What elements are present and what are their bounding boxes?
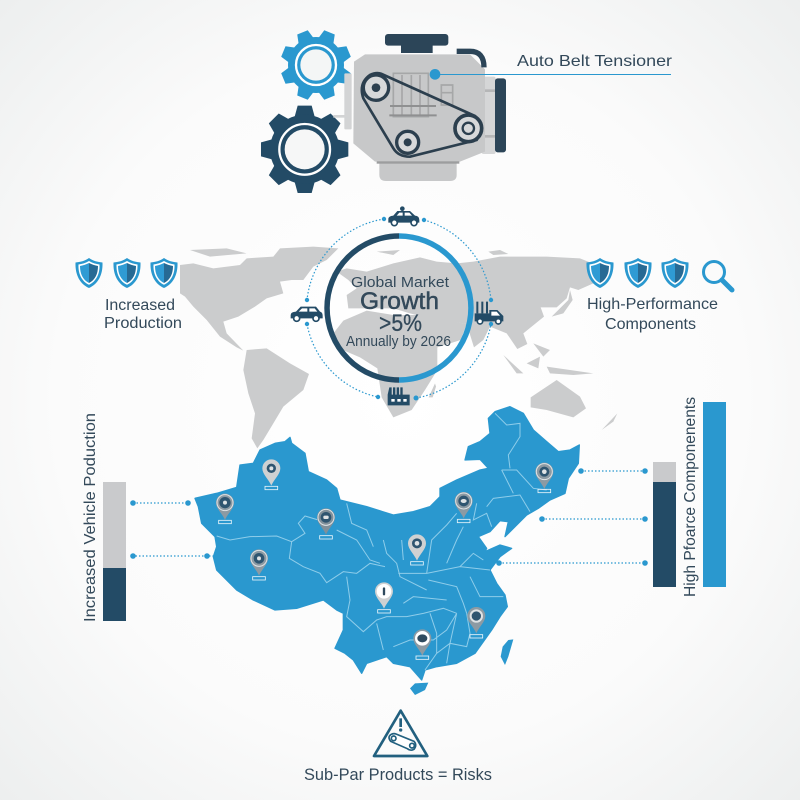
province borders — [217, 413, 547, 670]
pin 9 — [413, 629, 431, 659]
circle text: global market growth: Global Market — [351, 274, 450, 291]
bar: increased vehicle production — [103, 482, 126, 621]
text: increased production: Production — [104, 315, 182, 332]
icon: factory — [388, 387, 410, 405]
text: high-performance components: High-Performance — [587, 296, 718, 313]
icon: right truck — [475, 302, 503, 324]
china map — [195, 407, 579, 695]
label: increased vehicle production: Increased Vehicle Poduction — [82, 413, 99, 622]
panel: increased production — [75, 258, 182, 332]
circle text: global market growth — [346, 274, 451, 350]
label: high performance components: High Pfoarce Componenents — [682, 397, 699, 597]
map pins — [216, 459, 553, 659]
icon: belt and pulleys — [362, 73, 482, 157]
callout line — [430, 69, 671, 80]
dotted orbit — [305, 217, 493, 400]
china mainland — [195, 407, 579, 680]
text: high-performance components: Components — [605, 316, 696, 333]
text: increased production — [104, 297, 182, 332]
icon: engine block — [333, 34, 506, 181]
icon: navy gear — [261, 106, 348, 193]
panel: high-performance components — [586, 258, 732, 333]
pin 2 — [216, 494, 234, 524]
icon: top car — [388, 206, 419, 226]
pin 4 — [250, 549, 268, 580]
bar: high performance components — [653, 462, 676, 587]
left connectors — [130, 500, 215, 559]
pin 3 — [317, 508, 335, 539]
hainan and taiwan — [410, 639, 513, 695]
label: sub-par products: Sub-Par Products = Risks — [304, 765, 492, 784]
icon: magnifier — [704, 262, 732, 290]
text: increased production: Increased — [105, 297, 175, 314]
world map — [180, 247, 617, 448]
icon: warning belt — [374, 711, 427, 756]
pin 8 — [375, 582, 393, 613]
pin 7 — [408, 534, 426, 565]
text: high-performance components — [587, 296, 718, 333]
circle text: global market growth: >5% — [379, 310, 422, 337]
engine with gears — [261, 29, 671, 193]
icon: shields left — [75, 258, 178, 288]
pin 6 — [455, 492, 473, 523]
right connectors — [496, 468, 648, 566]
pin 10 — [467, 607, 485, 638]
icon: shields right — [586, 258, 689, 288]
pin 1 — [262, 459, 280, 490]
label: auto belt tensioner: Auto Belt Tensioner — [517, 53, 673, 70]
circle text: global market growth: Annually by 2026 — [346, 334, 451, 350]
icon: left car — [291, 307, 323, 321]
bar: blue — [703, 402, 726, 587]
circle text: global market growth: Growth — [360, 288, 439, 315]
icon: blue gear — [280, 29, 352, 101]
growth ring — [327, 236, 471, 380]
pin 5 — [535, 463, 553, 493]
